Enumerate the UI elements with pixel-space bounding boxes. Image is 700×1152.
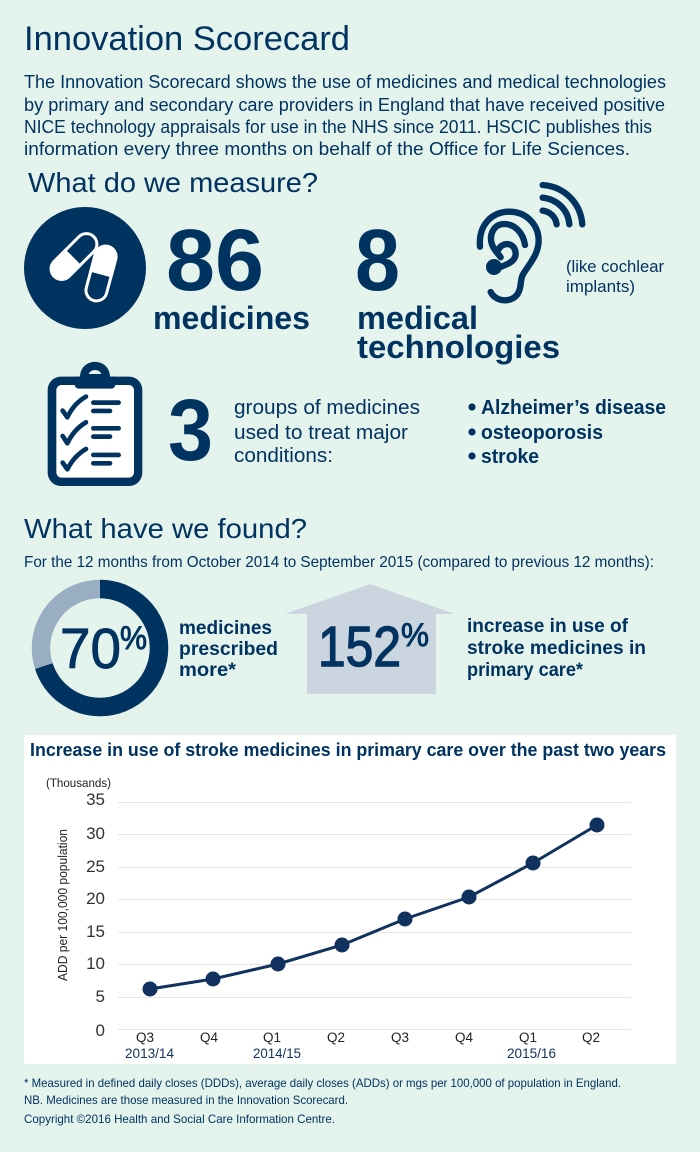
footnotes: * Measured in defined daily closes (DDDs), average daily closes (ADDs) or mgs per 100,000 of population in England.	[24, 1076, 621, 1090]
label: medicines prescribed more	[179, 617, 278, 681]
x axis labels: Q4	[455, 1030, 474, 1045]
list: conditions: osteoporosis	[481, 421, 603, 444]
stat: 8 medical technologies: 8	[355, 212, 400, 309]
title: Innovation Scorecard	[24, 20, 350, 58]
stat: 86 medicines: 86	[166, 212, 264, 309]
note: like cochlear implants	[566, 257, 664, 296]
intro paragraph: by primary and secondary care providers in England that have received positive	[24, 95, 665, 115]
list: conditions: stroke	[481, 445, 539, 468]
line series	[142, 818, 604, 996]
x axis labels: Q2	[582, 1030, 600, 1045]
label: increase in stroke medicines	[467, 615, 646, 681]
stat: 86 medicines	[153, 212, 310, 336]
y axis labels: 25	[86, 857, 105, 876]
x axis labels: Q2	[327, 1030, 345, 1045]
y axis title: ADD per 100,000 population	[56, 829, 70, 981]
intro paragraph: NICE technology appraisals for use in the NHS since 2011. HSCIC publishes this	[24, 117, 652, 137]
stat: 3 groups of medicines: 3	[168, 382, 213, 479]
chart title: Increase in use of stroke medicines in primary care over the past two years	[30, 740, 666, 760]
arrow: 152% increase	[285, 584, 455, 694]
x axis labels: Q1	[519, 1030, 537, 1045]
stat: 3 groups of medicines: conditions:	[234, 445, 333, 467]
stat: 3 groups of medicines	[168, 382, 420, 479]
y axis labels: 10	[86, 954, 105, 973]
icon: medicines pills	[24, 207, 146, 329]
x axis labels: Q3	[391, 1030, 409, 1045]
y axis labels: 0	[96, 1021, 105, 1040]
unit label: (Thousands)	[46, 778, 111, 790]
heading: what do we measure: What do we measure?	[28, 167, 318, 198]
list: conditions	[468, 396, 666, 468]
stat: 8 medical technologies	[355, 212, 560, 365]
heading: what have we found: What have we found?	[24, 513, 307, 544]
x axis labels: Q3	[136, 1030, 154, 1045]
intro paragraph	[24, 72, 666, 159]
donut chart: 70%	[41, 589, 159, 707]
panel: line chart	[24, 735, 676, 1064]
intro paragraph: The Innovation Scorecard shows the use of medicines and medical technologies	[24, 72, 666, 92]
y axis labels	[86, 790, 105, 1040]
stat: 8 medical technologies: technologies	[357, 329, 560, 365]
label: increase in stroke medicines: primary care*	[467, 659, 583, 681]
y axis labels: 5	[96, 987, 105, 1006]
icon: ear with signal waves	[480, 185, 582, 300]
y axis labels: 15	[86, 922, 105, 941]
stat: 3 groups of medicines: groups of medicines	[234, 397, 420, 419]
label: medicines prescribed more: prescribed	[179, 638, 278, 660]
intro paragraph: information every three months on behalf of the Office for Life Sciences.	[24, 139, 630, 159]
footnotes	[24, 1076, 621, 1126]
x axis labels: 2014/15	[253, 1046, 301, 1061]
stat: 8 medical technologies: medical	[357, 300, 478, 336]
y axis labels: 35	[86, 790, 105, 809]
footnotes: NB. Medicines are those measured in the Innovation Scorecard.	[24, 1093, 348, 1107]
x axis labels: 2015/16	[507, 1046, 556, 1061]
x axis labels	[125, 1030, 600, 1061]
note: like cochlear implants: implants)	[566, 277, 635, 296]
icon: clipboard checklist	[48, 362, 142, 486]
stat: 3 groups of medicines: used to treat major	[234, 422, 408, 444]
y axis labels: 20	[86, 889, 105, 908]
arrow: 152% increase: %	[401, 617, 429, 653]
arrow: 152% increase: 152	[318, 615, 401, 679]
y axis labels: 30	[86, 824, 105, 843]
label: medicines prescribed more: medicines	[179, 617, 272, 639]
donut chart: 70%: %	[120, 620, 147, 656]
list: conditions: Alzheimer’s disease	[481, 396, 666, 419]
stat: 86 medicines: medicines	[153, 300, 310, 336]
donut chart: 70%: 70	[60, 617, 121, 681]
x axis labels: Q4	[200, 1030, 219, 1045]
note: like cochlear implants: (like cochlear	[566, 257, 664, 276]
footnotes: Copyright ©2016 Health and Social Care Information Centre.	[24, 1112, 335, 1126]
label: increase in stroke medicines: stroke medicines in	[467, 637, 646, 659]
label: medicines prescribed more: more*	[179, 659, 236, 681]
subheading: reporting period: For the 12 months from October 2014 to September 2015 (compared to previous 12 months):	[24, 554, 654, 571]
label: increase in stroke medicines: increase in use of	[467, 615, 628, 637]
x axis labels: 2013/14	[125, 1046, 174, 1061]
x axis labels: Q1	[263, 1030, 281, 1045]
